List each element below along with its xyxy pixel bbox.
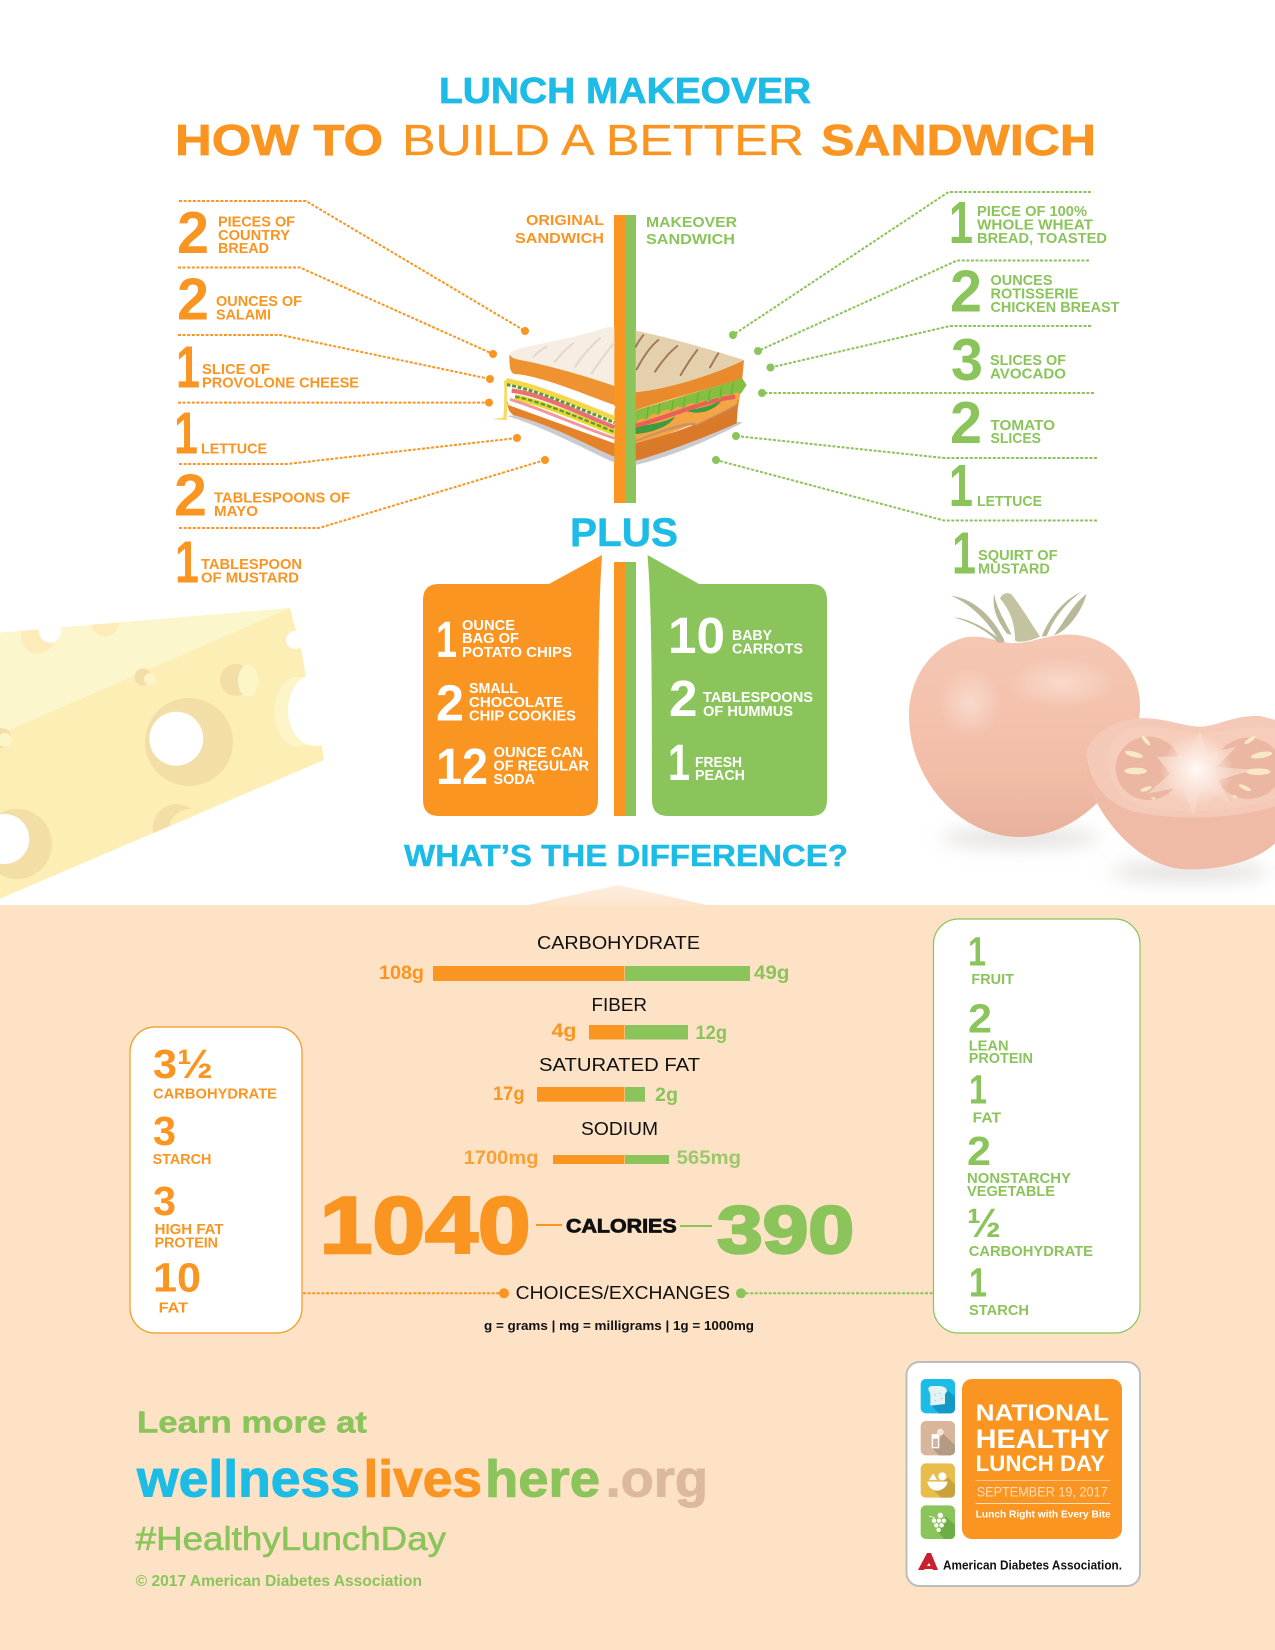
item: ounces of salami	[177, 266, 497, 358]
heading: plus: PLUS	[570, 511, 678, 555]
panel: event title: HEALTHY	[976, 1424, 1110, 1454]
side: cookies	[436, 675, 576, 732]
center divider: lower	[614, 562, 636, 816]
row: sodium: SODIUM	[581, 1118, 658, 1139]
left half	[507, 413, 614, 463]
item: tablespoons of mayo: TABLESPOONS OF	[214, 490, 350, 507]
pointer triangle above peach panel	[528, 885, 707, 905]
item: pieces of country bread: COUNTRY	[218, 227, 290, 244]
item: tablespoon of mustard: TABLESPOON	[201, 556, 302, 573]
connector: choices exchanges: CHOICES/EXCHANGES	[516, 1282, 730, 1303]
side: hummus: OF HUMMUS	[703, 703, 793, 720]
row: saturated fat: 17g	[493, 1084, 524, 1105]
background: peach lower panel	[0, 905, 1275, 1650]
exchange: nonstarchy vegetable: 2	[967, 1128, 991, 1174]
row: sodium: 1700mg	[464, 1148, 539, 1169]
label: original sandwich: SANDWICH	[515, 230, 604, 247]
item: slice of provolone cheese: SLICE OF	[202, 361, 270, 378]
item: lettuce: LETTUCE	[201, 440, 267, 458]
item: whole wheat bread	[729, 190, 1107, 339]
item: tomato slices: TOMATO	[990, 417, 1055, 434]
item: rotisserie chicken breast: ROTISSERIE	[990, 285, 1078, 302]
item: tablespoons of mayo	[174, 434, 521, 529]
exchange: fruit	[968, 929, 1014, 988]
exchange: high fat protein	[153, 1178, 224, 1252]
row: carbohydrate	[379, 932, 790, 984]
row: saturated fat	[493, 1054, 700, 1106]
heading: what's the difference: WHAT’S THE DIFFERENCE?	[404, 838, 848, 873]
item: lettuce	[174, 399, 493, 466]
side: peach	[668, 734, 745, 791]
item: whole wheat bread: WHOLE WHEAT	[977, 217, 1093, 234]
heading: how to build a better sandwich	[175, 116, 1096, 165]
item: tablespoon of mustard: 1	[175, 530, 199, 596]
side: cookies: 2	[436, 675, 464, 732]
side: peach: FRESH	[695, 754, 742, 771]
text: website url: lives	[364, 1451, 482, 1509]
exchange: half carbohydrate: CARBOHYDRATE	[969, 1243, 1093, 1260]
half tomato	[1087, 716, 1275, 869]
exchange: lean protein: 2	[968, 996, 992, 1042]
exchange: fat	[969, 1067, 1001, 1127]
item: pieces of country bread: BREAD	[218, 240, 269, 257]
exchange: carbohydrate	[153, 1041, 277, 1103]
row: carbohydrate: 49g	[754, 963, 790, 984]
connector: choices exchanges	[303, 1282, 934, 1303]
label: original sandwich	[515, 212, 604, 247]
exchange: lean protein: PROTEIN	[969, 1050, 1033, 1067]
side: potato chips: 1	[436, 611, 457, 668]
exchange: lean protein: LEAN	[969, 1038, 1009, 1055]
item: pieces of country bread: PIECES OF	[218, 214, 295, 230]
side: hummus: TABLESPOONS	[703, 689, 813, 706]
panel: event title: SEPTEMBER 19, 2017	[977, 1484, 1108, 1500]
row: fiber: 12g	[696, 1023, 727, 1044]
item: slices of avocado: 3	[951, 327, 983, 393]
exchange: fat: 1	[969, 1067, 987, 1113]
panel: makeover ingredients	[712, 190, 1120, 586]
icon: bread	[921, 1379, 955, 1413]
item: rotisserie chicken breast	[754, 258, 1120, 355]
exchange: fat: FAT	[159, 1300, 188, 1317]
item: whole wheat bread: 1	[949, 190, 973, 256]
row: sodium: 565mg	[677, 1148, 741, 1169]
item: slice of provolone cheese	[176, 334, 494, 400]
row: sodium	[464, 1118, 741, 1169]
item: lettuce: LETTUCE	[977, 493, 1042, 510]
chart: nutrient comparison bars	[379, 932, 790, 1169]
item: rotisserie chicken breast: OUNCES	[990, 272, 1052, 289]
side: soda: OF REGULAR	[494, 758, 589, 775]
item: ounces of salami: SALAMI	[216, 306, 271, 324]
label: makeover sandwich: MAKEOVER	[646, 214, 737, 231]
exchange: fat: FAT	[973, 1110, 1001, 1127]
item: rotisserie chicken breast: CHICKEN BREAST	[990, 299, 1120, 316]
text: website url	[136, 1451, 708, 1509]
item: lettuce: 1	[949, 453, 973, 519]
item: ounces of salami: 2	[177, 266, 209, 332]
center divider: top	[614, 215, 636, 503]
number: 1040 calories: 1040	[320, 1181, 531, 1271]
logo: american diabetes association	[918, 1553, 1122, 1572]
icon: grapes	[921, 1505, 955, 1539]
calories comparison	[320, 1181, 854, 1271]
item: squirt of mustard	[712, 456, 1097, 586]
item: squirt of mustard: MUSTARD	[978, 560, 1050, 578]
side: potato chips: OUNCE	[462, 617, 515, 634]
side: peach: 1	[668, 734, 690, 791]
icon: bowl	[921, 1463, 955, 1498]
item: squirt of mustard: 1	[952, 520, 976, 586]
label: makeover sandwich	[646, 214, 737, 248]
exchange: high fat protein: 3	[153, 1178, 176, 1224]
text: website url: .org	[606, 1451, 708, 1509]
side: hummus	[669, 670, 813, 727]
item: slices of avocado: SLICES OF	[990, 352, 1066, 369]
side: soda: 12	[436, 738, 488, 795]
text: website url: wellness	[136, 1451, 360, 1509]
right half	[636, 422, 743, 465]
item: tablespoons of mayo: 2	[174, 463, 207, 529]
item: ounces of salami: OUNCES OF	[216, 293, 302, 310]
item: squirt of mustard: SQUIRT OF	[978, 547, 1058, 564]
side: peach: PEACH	[695, 767, 745, 784]
panel: original ingredients	[174, 200, 549, 596]
exchange: starch	[969, 1260, 1029, 1319]
item: pieces of country bread	[177, 200, 529, 335]
side: hummus: 2	[669, 670, 698, 727]
label: calories: CALORIES	[566, 1216, 677, 1238]
exchange: fat: 10	[153, 1255, 201, 1301]
item: slice of provolone cheese: 1	[176, 334, 200, 400]
illustration: tomatoes	[909, 592, 1275, 882]
exchange: fruit: 1	[968, 929, 986, 975]
footer: learn more	[136, 1405, 708, 1590]
row: saturated fat: 2g	[655, 1085, 678, 1106]
exchange: starch: 3	[153, 1108, 176, 1154]
text: copyright: © 2017 American Diabetes Association	[136, 1573, 422, 1590]
side: soda: SODA	[494, 771, 535, 788]
row: fiber: 4g	[552, 1021, 576, 1042]
exchange: fruit: FRUIT	[971, 971, 1014, 988]
row: carbohydrate: 108g	[379, 963, 424, 984]
exchange: carbohydrate: CARBOHYDRATE	[153, 1086, 277, 1103]
item: lettuce: 1	[174, 400, 198, 466]
side: baby carrots: BABY	[732, 627, 772, 644]
item: lettuce	[732, 432, 1097, 519]
side: baby carrots	[668, 607, 803, 664]
exchange: carbohydrate: 3½	[153, 1041, 213, 1087]
badge: national healthy lunch day	[906, 1362, 1140, 1586]
label: original sandwich: ORIGINAL	[526, 212, 604, 229]
panel: event title: LUNCH DAY	[976, 1451, 1105, 1476]
item: slices of avocado: AVOCADO	[990, 365, 1066, 382]
side: cookies: SMALL	[469, 680, 518, 697]
number: 390 calories: 390	[717, 1193, 854, 1268]
item: slice of provolone cheese: PROVOLONE CHEESE	[202, 374, 359, 392]
exchange: high fat protein: HIGH FAT	[155, 1221, 224, 1238]
panel: event title	[962, 1379, 1122, 1539]
exchange: half carbohydrate	[967, 1200, 1093, 1260]
side: soda: OUNCE CAN	[494, 744, 583, 761]
exchange: nonstarchy vegetable: VEGETABLE	[967, 1183, 1055, 1200]
panel: makeover sides	[648, 555, 827, 816]
side: cookies: CHOCOLATE	[469, 694, 563, 711]
item: slices of avocado	[766, 326, 1091, 393]
item: whole wheat bread: PIECE OF 100%	[977, 203, 1087, 220]
row: saturated fat: SATURATED FAT	[539, 1054, 700, 1075]
illustration: cheese wedge	[0, 608, 342, 898]
item: tomato slices	[758, 389, 1094, 456]
item: tablespoon of mustard	[175, 456, 549, 596]
label: makeover sandwich: SANDWICH	[646, 231, 735, 248]
exchange: starch: 1	[969, 1260, 987, 1306]
heading: how to build a better sandwich: SANDWICH	[821, 116, 1096, 165]
text: learn more at: Learn more at	[137, 1405, 367, 1440]
exchange: nonstarchy vegetable: NONSTARCHY	[967, 1170, 1071, 1187]
logo: american diabetes association: American Diabetes Association.	[943, 1557, 1122, 1572]
exchange: lean protein	[968, 996, 1033, 1067]
panel: original exchanges	[130, 1027, 302, 1333]
panel: event title: NATIONAL	[976, 1400, 1109, 1426]
subtitle: lunch makeover: LUNCH MAKEOVER	[439, 70, 811, 111]
row: fiber	[552, 994, 727, 1044]
item: tablespoon of mustard: OF MUSTARD	[201, 570, 299, 587]
icon: drink	[921, 1421, 955, 1455]
side: baby carrots: 10	[668, 607, 725, 664]
item: tomato slices: SLICES	[990, 430, 1041, 447]
text: website url: here	[485, 1451, 600, 1509]
heading: how to build a better sandwich: HOW TO	[175, 116, 383, 165]
side: baby carrots: CARROTS	[732, 641, 803, 658]
text: hashtag: #HealthyLunchDay	[136, 1520, 447, 1557]
footnote: units: g = grams | mg = milligrams | 1g = 1000mg	[484, 1319, 754, 1333]
exchange: starch: STARCH	[153, 1151, 211, 1168]
item: tomato slices: 2	[950, 390, 982, 456]
side: potato chips: BAG OF	[462, 630, 519, 647]
item: tablespoons of mayo: MAYO	[214, 503, 258, 520]
exchange: high fat protein: PROTEIN	[155, 1235, 218, 1252]
row: fiber: FIBER	[592, 994, 647, 1015]
side: cookies: CHIP COOKIES	[469, 708, 576, 725]
heading: how to build a better sandwich: BUILD A BETTER	[402, 116, 804, 165]
item: pieces of country bread: 2	[177, 200, 209, 266]
row: carbohydrate: CARBOHYDRATE	[537, 932, 700, 953]
exchange: half carbohydrate: ½	[967, 1200, 1001, 1246]
panel: event title: Lunch Right with Every Bite	[976, 1510, 1111, 1520]
side: potato chips	[436, 611, 572, 668]
item: whole wheat bread: BREAD, TOASTED	[977, 230, 1107, 247]
item: rotisserie chicken breast: 2	[950, 258, 982, 324]
side: potato chips: POTATO CHIPS	[462, 644, 572, 661]
panel: makeover exchanges	[934, 919, 1140, 1333]
exchange: starch: STARCH	[969, 1302, 1029, 1319]
side: soda	[436, 738, 589, 795]
exchange: nonstarchy vegetable	[967, 1128, 1071, 1200]
title	[175, 70, 1096, 165]
illustration: sandwich	[492, 327, 747, 465]
panel: original sides	[423, 555, 602, 816]
exchange: starch	[153, 1108, 211, 1168]
